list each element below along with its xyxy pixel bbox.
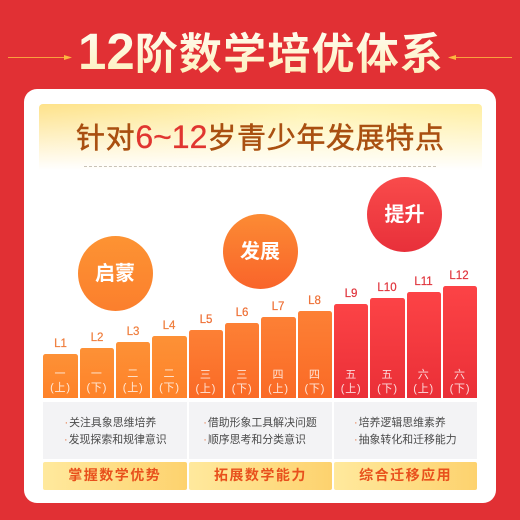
circle: 启蒙 (78, 236, 152, 310)
L2 label: L2 (91, 332, 103, 344)
label: 拓展数学能力: 拓展数学能力 (214, 467, 307, 483)
L11 bar: 六 (418, 369, 430, 381)
L12 bar: 六 (454, 369, 466, 381)
circle: 提升: 提升 (384, 204, 424, 226)
L5 label: L5 (200, 314, 212, 326)
L11 bar: (上) (413, 383, 434, 395)
L10 bar: 五 (382, 369, 393, 381)
L9 bar: (上) (341, 383, 362, 395)
L8 bar: (下) (304, 383, 325, 395)
bullet 1: ·关注具象思维培养 (64, 417, 156, 429)
L6 bar (225, 323, 259, 398)
arrow: right of title (448, 55, 512, 60)
L2 bar: 一 (91, 368, 103, 380)
L7 bar: 四 (273, 369, 284, 381)
circle: 发展: 发展 (240, 240, 280, 262)
L4 bar: (下) (159, 382, 180, 394)
L10 bar: (下) (377, 383, 398, 395)
dashed divider (84, 166, 436, 167)
panel: stage 1 description (43, 402, 186, 459)
bullet 2: ·抽象转化和迁移能力 (354, 434, 457, 446)
L4 bar: 二 (164, 368, 175, 380)
L8 bar: 四 (309, 369, 321, 381)
panel: stage 3 description (334, 402, 477, 459)
L5 bar: (上) (195, 383, 216, 395)
L1 bar: 一 (55, 368, 66, 380)
subtitle: 针对6~12岁青少年发展特点 (76, 119, 445, 155)
circle: 提升 (367, 177, 442, 252)
panel: stage 2 description (189, 402, 332, 459)
L4 label: L4 (163, 320, 175, 332)
L4 bar (152, 336, 187, 398)
L10 bar (370, 298, 405, 398)
L1 label: L1 (54, 338, 67, 350)
L5 bar: 三 (200, 369, 212, 381)
L3 bar: 二 (127, 368, 139, 380)
L2 bar (80, 348, 114, 398)
L12 label: L12 (449, 270, 469, 282)
L9 bar (334, 304, 368, 398)
L6 bar: (下) (232, 383, 253, 395)
label: 拓展数学能力 (189, 462, 332, 490)
L5 bar (189, 330, 223, 398)
L10 label: L10 (377, 282, 397, 294)
L7 label: L7 (272, 301, 284, 313)
L3 bar: (上) (123, 382, 144, 394)
L8 label: L8 (308, 295, 321, 307)
bullet 1: ·借助形象工具解决问题 (203, 417, 317, 429)
L8 bar (298, 310, 332, 398)
L2 bar: (下) (86, 382, 107, 394)
L12 bar (443, 286, 477, 398)
bullet 2: ·顺序思考和分类意识 (203, 434, 306, 446)
label: 综合迁移应用: 综合迁移应用 (359, 467, 452, 483)
L11 label: L11 (414, 276, 433, 288)
L9 label: L9 (345, 288, 357, 300)
L7 bar: (上) (268, 383, 289, 395)
panel: main card (24, 89, 496, 503)
L9 bar: 五 (345, 369, 357, 381)
arrow: left of title (8, 55, 72, 60)
L7 bar (261, 317, 296, 398)
L3 bar (116, 342, 150, 398)
label: 掌握数学优势: 掌握数学优势 (68, 467, 161, 483)
L12 bar: (下) (450, 383, 470, 395)
label: 综合迁移应用 (334, 462, 477, 490)
circle: 启蒙: 启蒙 (95, 262, 135, 284)
L1 bar (43, 354, 78, 398)
L6 label: L6 (236, 307, 248, 319)
circle: 发展 (222, 214, 298, 288)
bullet 1: ·培养逻辑思维素养 (354, 417, 446, 429)
L1 bar: (上) (50, 382, 71, 394)
L11 bar (406, 292, 441, 398)
L3 label: L3 (127, 326, 139, 338)
header band (39, 104, 482, 170)
bullet 2: ·发现探索和规律意识 (64, 434, 167, 446)
L6 bar: 三 (236, 369, 248, 381)
label: 掌握数学优势 (43, 462, 186, 490)
